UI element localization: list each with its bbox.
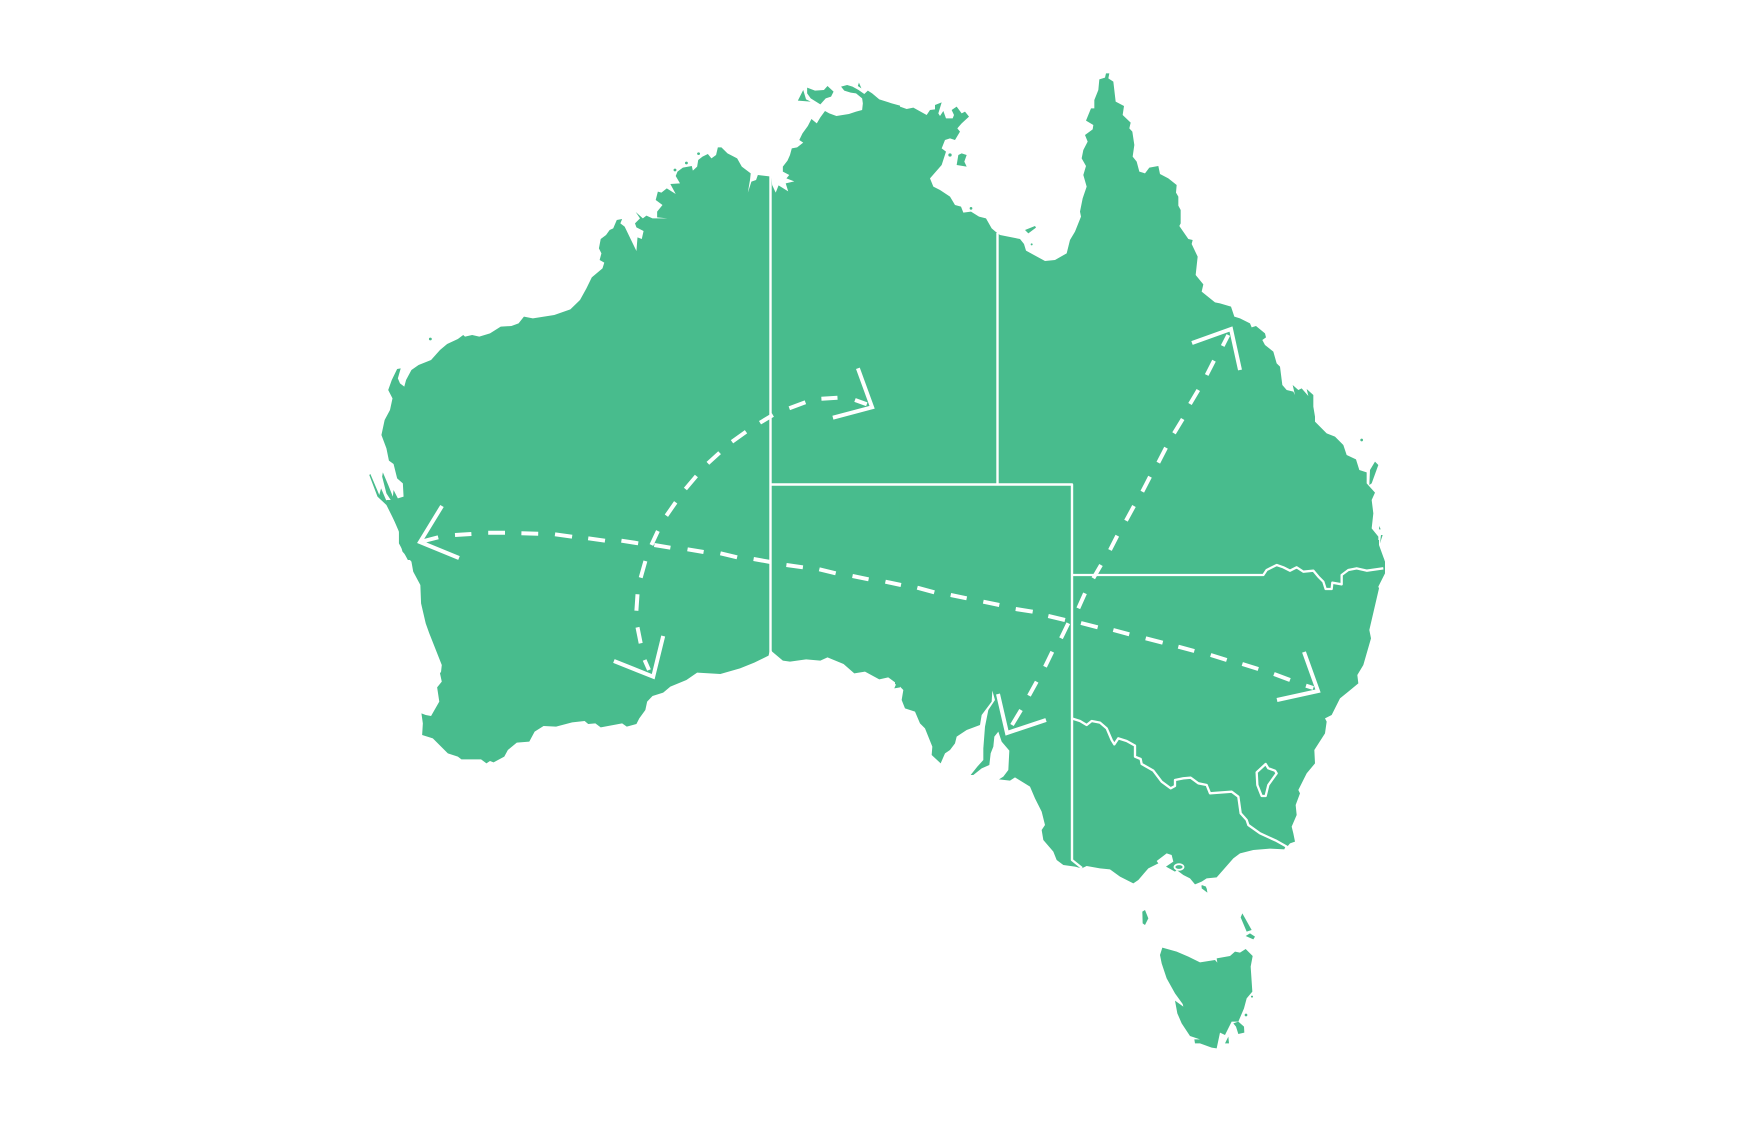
mainland: south-west [386, 500, 900, 763]
island: Tasmania and Bass Strait islands [1142, 886, 1255, 1048]
mainland: north-east [895, 73, 1384, 560]
state borders [770, 176, 1383, 870]
arrow: south-west to north-east route [998, 329, 1240, 733]
arrowhead: east [1277, 652, 1318, 700]
landmass: mainland and islands [369, 73, 1385, 1048]
arrow: west to east route [420, 506, 1318, 700]
arrowhead: south [614, 636, 663, 677]
border: NSW and Victoria [1072, 718, 1287, 851]
arrows: dashed routes with chevron heads [420, 329, 1318, 733]
border: NT, SA and QLD [770, 484, 1082, 868]
border: QLD and NSW [1072, 565, 1383, 589]
border: WA [769, 176, 772, 656]
bay outline: Western Port [1174, 864, 1184, 870]
arrowhead: north-east [1192, 329, 1240, 370]
arrow: curved north-south route [614, 368, 872, 677]
arrowhead: west [420, 506, 459, 558]
arrowhead: south-west [998, 694, 1046, 733]
mainland: north-west [369, 83, 900, 560]
mainland: south-east [895, 540, 1385, 893]
border: NT and QLD [996, 233, 999, 484]
arrowhead: north-east curve end [833, 368, 872, 418]
border: ACT [1257, 764, 1277, 796]
